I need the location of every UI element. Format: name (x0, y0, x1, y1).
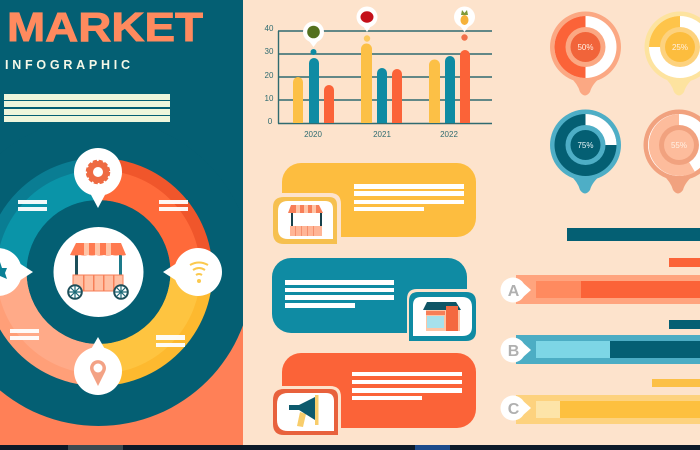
axis labels: 2022 (440, 130, 458, 139)
panel: yellow card (272, 163, 476, 245)
chart: bar chart 2020-2022 (265, 6, 492, 139)
axis labels: 2021 (373, 130, 391, 139)
panel: bar A: A (508, 283, 520, 300)
markers (310, 34, 468, 55)
axis labels: 20 (265, 71, 274, 80)
ring labels (10, 200, 188, 347)
subtitle: INFOGRAPHIC (5, 58, 130, 72)
icon: gear pin (74, 148, 122, 208)
panel: teal card (272, 258, 476, 341)
panel: bar C (500, 379, 700, 424)
icon: star pin (0, 248, 33, 296)
chart: donut 50%: 50% (577, 43, 594, 52)
panel: left market panel (0, 0, 252, 445)
panel: bar B: B (508, 343, 519, 360)
icon: green fruit (303, 22, 324, 47)
panel: bar A (500, 258, 700, 304)
title: MARKET (7, 4, 203, 50)
axis labels: 2020 (304, 130, 322, 139)
heading bar (567, 228, 700, 241)
text block: intro lines (4, 94, 170, 122)
axis labels: 0 (268, 117, 273, 126)
axis labels: 40 (265, 24, 274, 33)
chart: donut 55% (644, 110, 700, 194)
bars 2022 (429, 50, 470, 123)
text lines (352, 372, 462, 400)
icon: megaphone (272, 386, 341, 436)
bars 2021 (361, 44, 402, 123)
chart: segmented ring (6, 179, 192, 365)
icon: pineapple (454, 6, 475, 32)
axis labels: 30 (265, 47, 274, 56)
chart: donut 55%: 55% (671, 141, 687, 150)
text lines (285, 280, 394, 308)
chart: donut 75%: 75% (577, 141, 594, 150)
chart: donut 75% (550, 110, 621, 194)
icon: market stall (272, 193, 341, 245)
bars 2020 (293, 58, 334, 123)
panel: red card (272, 353, 476, 436)
bottom dark strip (0, 445, 700, 450)
panel: bar C: C (508, 401, 520, 418)
text lines (354, 184, 464, 211)
chart: donut 50% (550, 12, 621, 96)
icon: location pin (74, 337, 122, 395)
axis labels (265, 24, 458, 139)
chart: donut 25% (644, 12, 700, 96)
chart: donut 25%: 25% (672, 43, 688, 52)
icon: market cart (54, 227, 144, 317)
panel: bar B (500, 320, 700, 364)
axis labels: 10 (265, 94, 274, 103)
icon: red fruit (356, 6, 378, 32)
icon: shop (407, 289, 476, 341)
icon: wifi pin (163, 248, 222, 296)
